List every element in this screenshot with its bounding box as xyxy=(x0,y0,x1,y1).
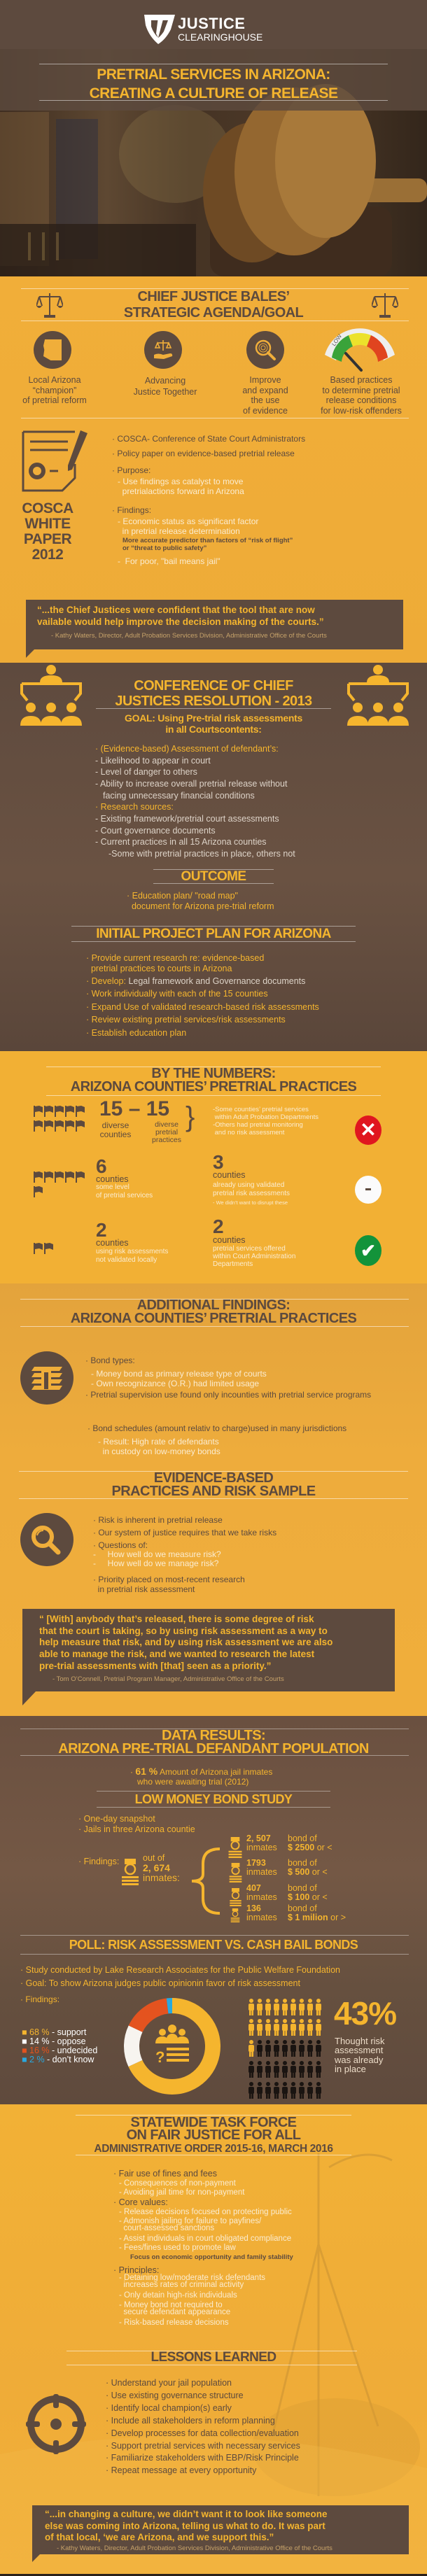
title: CREATING A CULTURE OF RELEASE xyxy=(90,85,337,101)
bond rows: inmates xyxy=(246,1843,277,1852)
row 1: 15 diverse counties xyxy=(34,1097,382,1145)
brace xyxy=(192,1847,220,1915)
quote: closing kathy waters: “...in changing a culture, we didn’t want it to look like someone xyxy=(45,2509,328,2519)
inmate total xyxy=(122,1853,180,1885)
row 1: 15 diverse counties: diverse xyxy=(155,1120,178,1129)
caption 4 xyxy=(321,375,402,416)
panel: data results xyxy=(0,1716,427,2104)
task force bullets: - Only detain high-risk individuals xyxy=(119,2291,237,2300)
icon: red x xyxy=(355,1115,382,1145)
task force bullets: · Fair use of fines and fees xyxy=(113,2169,217,2179)
heading: low money bond study: LOW MONEY BOND STUDY xyxy=(135,1792,292,1806)
task force bullets: secure defendant appearance xyxy=(123,2308,230,2316)
heading: ARIZONA COUNTIES’ PRETRIAL PRACTICES xyxy=(71,1079,356,1095)
icon: green check xyxy=(355,1235,382,1266)
caption 4: Based practices xyxy=(330,375,392,385)
task force bullets: court-assessed sanctions xyxy=(123,2224,214,2232)
donut chart xyxy=(124,1998,220,2095)
findings bullets xyxy=(85,1356,371,1456)
logo: JUSTICE xyxy=(178,15,245,32)
legend: ■ 14 % - oppose xyxy=(22,2036,86,2046)
row 2: 6 counties / 3 counties: pretrial risk assessments xyxy=(213,1190,290,1197)
quote: tom o'connell: - Tom O’Connell, Pretrial Program Manager, Administrative Office of the Courts xyxy=(52,1675,284,1683)
caption 3: the use xyxy=(251,395,280,405)
heading: ON FAIR JUSTICE FOR ALL xyxy=(127,2127,300,2143)
row 2: 6 counties / 3 counties: counties xyxy=(96,1174,129,1184)
row 3: 2 counties / 2 counties: using risk assessments xyxy=(96,1248,168,1255)
row 3: 2 counties / 2 counties: within Court Administration xyxy=(213,1253,295,1260)
row 1: 15 diverse counties: } xyxy=(186,1102,195,1132)
task force bullets: - Release decisions focused on protecting public xyxy=(119,2208,292,2216)
heading: BY THE NUMBERS: xyxy=(151,1066,276,1081)
task force bullets: Focus on economic opportunity and family stability xyxy=(130,2253,293,2261)
bond rows: 136 xyxy=(246,1903,261,1913)
bond rows: $ 500 or < xyxy=(288,1867,328,1877)
bond rows: $ 2500 or < xyxy=(288,1843,332,1852)
outcome heading: OUTCOME xyxy=(181,869,246,884)
61% stat: · 61 % Amount of Arizona jail inmates xyxy=(130,1766,272,1777)
row 2: 6 counties / 3 counties: already using validated xyxy=(213,1181,284,1189)
findings bullets: · Pretrial supervision use found only incounties with pretrial service programs xyxy=(85,1390,371,1400)
panel: statewide task force and lessons learned: ADMINISTRATIVE ORDER 2015-16, MARCH 2016 xyxy=(94,2143,333,2155)
icon: green check: ✔ xyxy=(360,1240,376,1261)
risk bullets: - How well do we measure risk? xyxy=(93,1549,221,1559)
row 2: 6 counties / 3 counties: 3 xyxy=(213,1151,224,1173)
panel: data results: in place xyxy=(335,2064,366,2074)
quote: kathy waters: - Kathy Waters, Director, Adult Probation Services Division, Administrative Office of the Courts xyxy=(51,632,327,640)
panel: data results: · Findings: xyxy=(78,1857,119,1866)
caption 1: Local Arizona xyxy=(28,375,81,385)
icon: hand with scales xyxy=(144,331,182,369)
resolution bullets: - Level of danger to others xyxy=(95,767,197,777)
row 3: 2 counties / 2 counties: 2 xyxy=(96,1219,107,1241)
panel: chief justice bales strategic agenda xyxy=(21,288,409,658)
cosca bullets: pretrialactions forward in Arizona xyxy=(122,486,244,496)
heading: STATEWIDE TASK FORCE xyxy=(131,2115,296,2130)
resolution bullets: - Court governance documents xyxy=(95,826,216,836)
panel: statewide task force and lessons learned xyxy=(0,2104,427,2576)
task force bullets: · Core values: xyxy=(113,2197,168,2207)
heading xyxy=(115,678,312,709)
heading xyxy=(58,1728,369,1757)
initial project plan heading: INITIAL PROJECT PLAN FOR ARIZONA xyxy=(96,927,331,941)
task force bullets xyxy=(0,2167,427,2332)
row 3: 2 counties / 2 counties: Departments xyxy=(213,1260,253,1268)
row 2: 6 counties / 3 counties: counties xyxy=(213,1170,246,1180)
resolution bullets: · (Evidence-based) Assessment of defendant’s: xyxy=(95,744,279,754)
icon: target xyxy=(26,2394,86,2454)
lessons bullets: · Support pretrial services with necessary services xyxy=(106,2441,300,2451)
task force bullets: - Admonish jailing for failure to payfines/ xyxy=(119,2217,261,2225)
task force bullets: - Money bond not required to xyxy=(119,2301,223,2309)
row 2: 6 counties / 3 counties: 6 xyxy=(96,1155,107,1177)
lessons bullets: · Develop processes for data collection/evaluation xyxy=(106,2428,299,2438)
panel: data results: assessment xyxy=(335,2045,383,2055)
row 3: 2 counties / 2 counties: not validated locally xyxy=(96,1256,157,1264)
heading: lessons learned: LESSONS LEARNED xyxy=(151,2350,276,2365)
outcome text: · Education plan/ "road map" xyxy=(127,891,238,901)
heading: ARIZONA COUNTIES’ PRETRIAL PRACTICES xyxy=(71,1311,356,1326)
heading: JUSTICES RESOLUTION - 2013 xyxy=(115,694,312,709)
heading: DATA RESULTS: xyxy=(162,1728,265,1743)
risk bullets: in pretrial risk assessment xyxy=(98,1584,195,1594)
caption 3: Improve xyxy=(249,375,281,385)
row 2: 6 counties / 3 counties xyxy=(34,1151,382,1206)
cosca bullets: or “threat to public safety” xyxy=(122,544,206,552)
heading: evidence-based: PRACTICES AND RISK SAMPLE xyxy=(112,1484,315,1499)
cosca label xyxy=(22,500,74,563)
icon: scales left xyxy=(36,293,63,318)
lessons bullets: · Understand your jail population xyxy=(106,2378,232,2388)
row 2: 6 counties / 3 counties: of pretrial services xyxy=(96,1192,153,1199)
quote: tom o'connell: able to manage the risk, and we wanted to research the latest xyxy=(39,1649,314,1659)
quote: closing kathy waters: - Kathy Waters, Director, Adult Probation Services Division, Administrative Office of the Courts xyxy=(57,2545,332,2552)
quote: kathy waters: “...the Chief Justices were confident that the tool that are now xyxy=(37,605,315,615)
heading: poll: POLL: RISK ASSESSMENT VS. CASH BAIL BONDS xyxy=(69,1938,358,1952)
panel: data results: Thought risk xyxy=(335,2036,385,2046)
caption 2: Justice Together xyxy=(134,387,197,397)
caption 3: and expand xyxy=(242,385,288,395)
caption 3: of evidence xyxy=(243,406,288,416)
cosca bullets: in pretrial release determination xyxy=(122,526,240,536)
header bar xyxy=(0,0,427,49)
project plan bullets: · Develop: Legal framework and Governance documents xyxy=(86,976,305,986)
panel: data results: · Findings: xyxy=(20,1994,59,2004)
title xyxy=(90,66,337,101)
icon: arizona xyxy=(34,331,71,369)
icon: meeting left xyxy=(20,665,82,726)
goal xyxy=(125,712,302,735)
task force bullets: - Avoiding jail time for non-payment xyxy=(119,2188,244,2197)
caption 1: of pretrial reform xyxy=(22,395,87,405)
bond rows: bond of xyxy=(288,1834,317,1843)
hero photo: gavel xyxy=(0,49,427,276)
heading: CHIEF JUSTICE BALES’ xyxy=(138,289,289,304)
task force bullets: · Principles: xyxy=(113,2265,159,2275)
bond rows: 1793 xyxy=(246,1858,266,1868)
task force bullets: increases rates of criminal activity xyxy=(123,2281,244,2289)
heading: STRATEGIC AGENDA/GOAL xyxy=(124,305,303,321)
legend: ■ 68 % - support xyxy=(22,2027,86,2037)
inmate total: 2, 674 xyxy=(143,1861,170,1873)
cosca label: WHITE xyxy=(24,516,71,532)
outcome text xyxy=(127,891,274,911)
cosca bullets: · Purpose: xyxy=(112,465,150,475)
icon: meeting right xyxy=(347,665,409,726)
findings bullets: · Bond schedules (amount relativ to charge)used in many jurisdictions xyxy=(88,1423,346,1433)
project plan bullets: · Establish education plan xyxy=(86,1028,186,1038)
cosca bullets: - Economic status as significant factor xyxy=(118,516,258,526)
bond rows xyxy=(228,1834,346,1922)
heading: ADDITIONAL FINDINGS: xyxy=(137,1297,290,1313)
poll bullets xyxy=(20,1965,340,1988)
legend xyxy=(22,2027,97,2064)
row 3: 2 counties / 2 counties: counties xyxy=(213,1235,246,1245)
heading xyxy=(71,1066,357,1095)
risk bullets: · Risk is inherent in pretrial release xyxy=(93,1515,223,1525)
quote: closing kathy waters xyxy=(32,2505,409,2554)
panel: by the numbers xyxy=(0,1051,427,1283)
bond rows: inmates xyxy=(246,1892,277,1902)
outcome text: document for Arizona pre-trial reform xyxy=(132,901,274,911)
bond study bullets: · Jails in three Arizona countie xyxy=(78,1824,195,1834)
row 1: 15 diverse counties: counties xyxy=(100,1129,131,1139)
title band xyxy=(0,49,427,111)
risk bullets: · Our system of justice requires that we take risks xyxy=(93,1528,276,1537)
cosca bullets: More accurate predictor than factors of “risk of flight” xyxy=(122,537,293,544)
project plan bullets: · Expand Use of validated research-based risk assessments xyxy=(86,1002,319,1012)
legend: ■ 2 % - don’t know xyxy=(22,2055,94,2064)
resolution bullets: - Ability to increase overall pretrial release without xyxy=(95,779,287,789)
lessons bullets: · Include all stakeholders in reform planning xyxy=(106,2416,275,2426)
bond rows: 407 xyxy=(246,1883,261,1893)
row 1: 15 diverse counties: within Adult Probation Departments xyxy=(215,1113,318,1121)
row 1: 15 diverse counties: -Others had pretrial monitoring xyxy=(213,1121,303,1129)
project plan bullets: pretrial practices to courts in Arizona xyxy=(91,964,232,973)
row 3: 2 counties / 2 counties: 2 xyxy=(213,1216,224,1237)
resolution bullets: facing unnecessary financial conditions xyxy=(103,791,255,801)
task force bullets: - Risk-based release decisions xyxy=(119,2318,229,2327)
logo: CLEARINGHOUSE xyxy=(178,31,262,43)
cosca label: PAPER xyxy=(24,531,71,547)
bond rows: bond of xyxy=(288,1883,317,1893)
bond rows: inmates xyxy=(246,1867,277,1877)
row 1: 15 diverse counties: and no risk assessment xyxy=(215,1129,284,1136)
bond rows: $ 1 milion or > xyxy=(288,1913,346,1922)
goal: in all Courtscontents: xyxy=(165,724,262,735)
row 1: 15 diverse counties: -Some counties’ pretrial services xyxy=(213,1106,309,1113)
resolution bullets: - Likelihood to appear in court xyxy=(95,756,211,766)
row 2: 6 counties / 3 counties: - We didn’t want to disrupt these xyxy=(213,1199,288,1206)
cosca bullets: - For poor, "bail means jail" xyxy=(118,556,220,566)
title: PRETRIAL SERVICES IN ARIZONA: xyxy=(97,66,330,83)
heading xyxy=(71,1297,357,1326)
findings bullets: - Money bond as primary release type of courts xyxy=(91,1369,267,1379)
inmate total: inmates: xyxy=(143,1872,180,1883)
poll bullets: · Goal: To show Arizona judges public opinionin favor of risk assessment xyxy=(20,1978,300,1988)
resolution bullets: -Some with pretrial practices in place, others not xyxy=(108,849,295,859)
risk bullets xyxy=(93,1515,276,1594)
donut chart: ? xyxy=(155,2048,164,2066)
project plan bullets: · Work individually with each of the 15 counties xyxy=(86,989,268,999)
goal: GOAL: Using Pre-trial risk assessments xyxy=(125,712,302,724)
caption 4: for low-risk offenders xyxy=(321,406,402,416)
task force bullets: - Fees/fines used to promote law xyxy=(119,2244,236,2252)
caption 4: to determine pretrial xyxy=(322,385,400,395)
poll bullets: · Study conducted by Lake Research Associates for the Public Welfare Foundation xyxy=(20,1965,340,1975)
panel: conference of chief justices xyxy=(0,663,427,1051)
resolution bullets: - Existing framework/pretrial court assessments xyxy=(95,814,279,824)
panel: additional findings and evidence-based practices xyxy=(0,1283,427,1716)
quote: kathy waters xyxy=(26,600,403,649)
task force bullets: - Assist individuals in court obligated compliance xyxy=(119,2234,291,2243)
panel: data results: out of xyxy=(143,1853,164,1863)
bond rows: 2, 507 xyxy=(246,1834,271,1843)
lessons bullets: · Repeat message at every opportunity xyxy=(106,2465,256,2475)
quote: tom o'connell: pre-trial assessments with [that] seen as a priority.” xyxy=(39,1661,271,1671)
row 1: 15 diverse counties: practices xyxy=(152,1136,181,1144)
43% stat: 43% xyxy=(334,1995,396,2032)
panel: data results: was already xyxy=(335,2055,383,2065)
cosca bullets: · COSCA- Conference of State Court Administrators xyxy=(112,434,305,444)
task force bullets: - Consequences of non-payment xyxy=(119,2179,236,2188)
bond rows: bond of xyxy=(288,1903,317,1913)
row 1: 15 diverse counties: pretrial xyxy=(155,1128,178,1136)
row 3: 2 counties / 2 counties: pretrial services offered xyxy=(213,1245,286,1253)
caption 2 xyxy=(133,376,197,397)
people pictogram xyxy=(248,1999,321,2099)
icon: risk gauge xyxy=(325,328,395,372)
icon: white dash xyxy=(355,1176,382,1204)
quote: tom o'connell: help measure that risk, and by using risk assessment we are also xyxy=(39,1637,332,1647)
61% stat xyxy=(130,1766,272,1787)
risk bullets: - How well do we manage risk? xyxy=(93,1558,218,1568)
project plan bullets: · Provide current research re: evidence-based xyxy=(86,953,264,963)
project plan bullets xyxy=(86,953,319,1038)
task force bullets: - Detaining low/moderate risk defendants xyxy=(119,2274,265,2282)
quote: closing kathy waters: else was coming into Arizona, telling us what to do. It was part xyxy=(45,2521,326,2531)
bond study bullets: · One-day snapshot xyxy=(78,1814,155,1824)
icon: red x: ✕ xyxy=(360,1119,377,1141)
heading: CONFERENCE OF CHIEF xyxy=(134,678,293,694)
lessons bullets: · Familiarize stakeholders with EBP/Risk Principle xyxy=(106,2453,299,2463)
findings bullets: · Bond types: xyxy=(85,1356,135,1365)
icon: fingerprint magnifier xyxy=(246,331,284,369)
bond rows: bond of xyxy=(288,1858,317,1868)
icon: money stack xyxy=(20,1351,74,1405)
cosca bullets: - Use findings as catalyst to move xyxy=(118,477,243,486)
heading: evidence-based xyxy=(112,1470,315,1499)
resolution bullets xyxy=(95,744,295,859)
cosca label: 2012 xyxy=(32,547,63,563)
cosca bullets: · Policy paper on evidence-based pretrial release xyxy=(112,449,295,458)
row 1: 15 diverse counties: 15 – 15 xyxy=(99,1097,169,1120)
bond study bullets xyxy=(78,1814,195,1834)
findings bullets: - Own recognizance (O.R.) had limited usage xyxy=(91,1379,259,1388)
61% stat: who were awaiting trial (2012) xyxy=(137,1777,248,1787)
lessons bullets xyxy=(106,2377,300,2477)
icon: risk gauge: LOW xyxy=(330,333,343,347)
resolution bullets: - Current practices in all 15 Arizona counties xyxy=(95,837,267,847)
icon: scales right xyxy=(372,293,398,318)
bond rows: $ 100 or < xyxy=(288,1892,328,1902)
findings bullets: - Result: High rate of defendants xyxy=(98,1437,219,1447)
decorative scale photo xyxy=(253,2153,420,2496)
icon: magnifier xyxy=(20,1513,74,1566)
legend: ■ 16 % - undecided xyxy=(22,2046,97,2055)
lessons bullets: · Use existing governance structure xyxy=(106,2391,244,2400)
quote: tom o'connell xyxy=(22,1609,395,1691)
findings bullets: in custody on low-money bonds xyxy=(103,1447,220,1456)
heading: ARIZONA PRE-TRIAL DEFANDANT POPULATION xyxy=(58,1741,369,1757)
quote: closing kathy waters: of that local, ‘we are Arizona, and we support this.” xyxy=(45,2532,274,2542)
caption 1: “champion” xyxy=(33,385,76,395)
caption 2: Advancing xyxy=(145,376,186,386)
row 3: 2 counties / 2 counties: counties xyxy=(96,1238,129,1248)
cosca label: COSCA xyxy=(22,500,74,516)
row 3: 2 counties / 2 counties xyxy=(34,1216,382,1268)
lessons bullets: · Identify local champion(s) early xyxy=(106,2403,232,2413)
bond rows: inmates xyxy=(246,1913,277,1922)
row 2: 6 counties / 3 counties: some level xyxy=(96,1183,130,1191)
logo xyxy=(144,15,262,44)
caption 3 xyxy=(242,375,288,416)
project plan bullets: · Review existing pretrial services/risk assessments xyxy=(86,1015,286,1025)
caption 1 xyxy=(22,375,87,405)
quote: tom o'connell: that the court is taking, so by using risk assessment as a way to xyxy=(39,1626,328,1636)
icon: flags 10 xyxy=(34,1106,85,1132)
risk bullets: · Priority placed on most-recent research xyxy=(93,1575,245,1584)
resolution bullets: · Research sources: xyxy=(95,802,174,812)
heading: evidence-based: EVIDENCE-BASED xyxy=(154,1470,273,1486)
cosca bullets xyxy=(112,434,305,566)
heading xyxy=(124,289,304,321)
quote: kathy waters: vailable would help improve the decision making of the courts.” xyxy=(37,617,324,627)
row 1: 15 diverse counties: diverse xyxy=(102,1120,129,1130)
cosca bullets: · Findings: xyxy=(112,505,151,515)
icon: white paper document xyxy=(22,430,88,491)
heading xyxy=(0,2116,427,2141)
quote: tom o'connell: “ [With] anybody that’s released, there is some degree of risk xyxy=(39,1614,314,1624)
caption 4: release conditions xyxy=(326,395,396,405)
risk bullets: · Questions of: xyxy=(93,1540,148,1550)
